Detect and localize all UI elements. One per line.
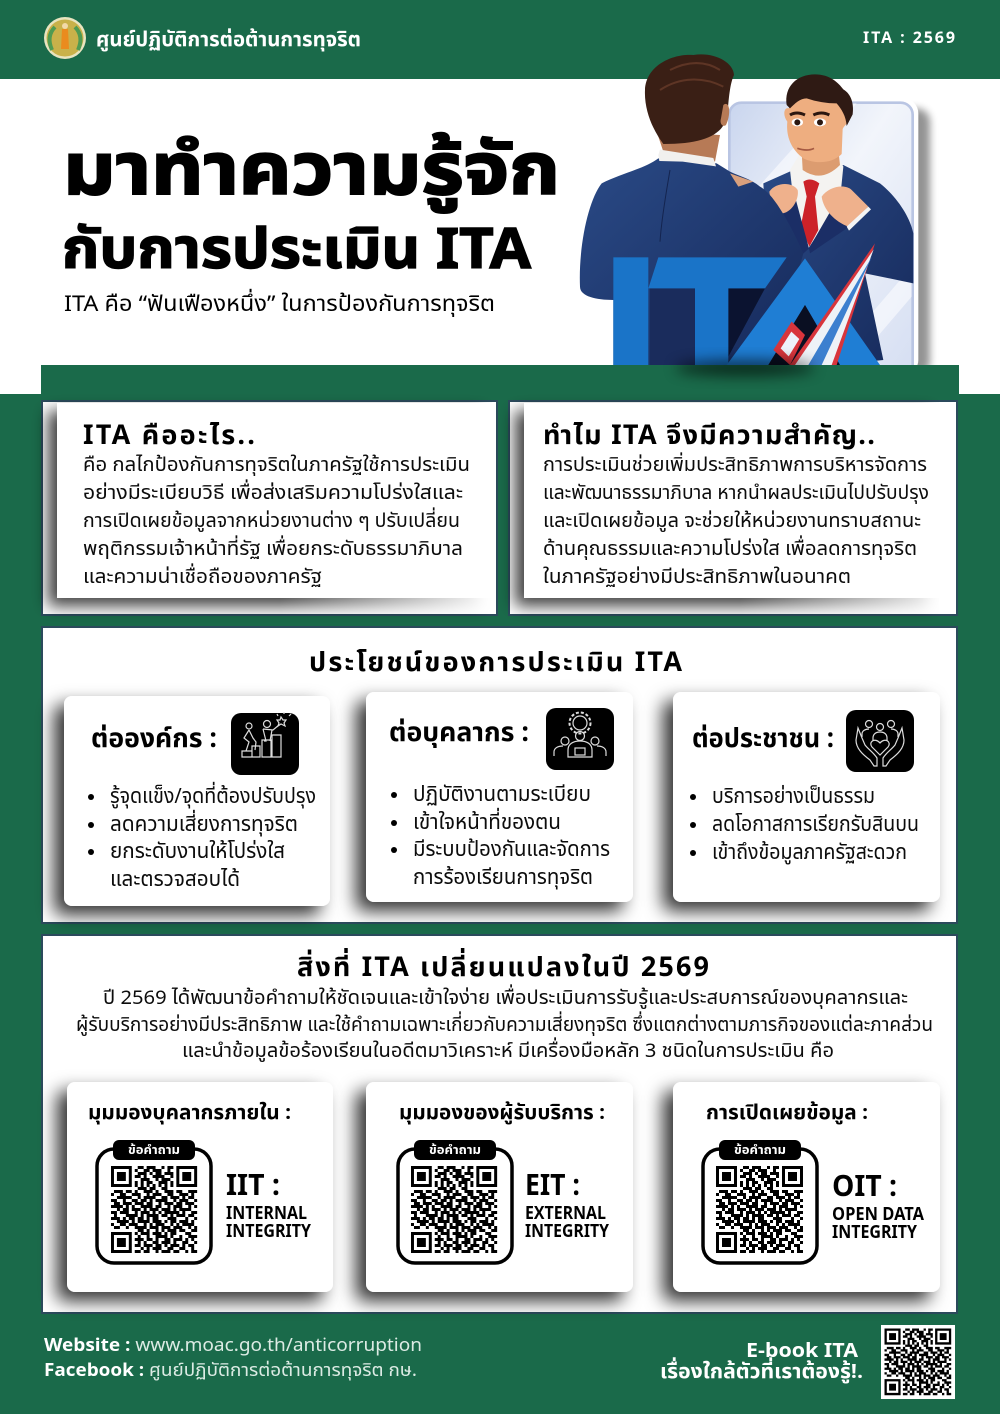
ITA logo letters [613,257,880,365]
mirror [727,98,930,379]
label: EXTERNAL [525,1201,606,1228]
QR frame: ข้อคำถาม [429,1142,481,1160]
logo seal [44,17,86,59]
card: OIT [673,1082,940,1292]
paragraph: และความน่าเชื่อถือของภาครัฐ [83,562,322,592]
footer e-book text [660,1336,863,1387]
label [525,1163,610,1246]
bullet list: เข้าใจหน้าที่ของตน [413,807,561,839]
card: EIT: มุมมองของผู้รับบริการ : [399,1098,605,1128]
card: for organisation: ต่อองค์กร : [91,719,217,760]
subtitle: ITA คือ “ฟันเฟืองหนึ่ง” ในการป้องกันการทุจริต [64,288,495,321]
label: INTEGRITY [832,1220,918,1247]
intro paragraph: ปี 2569 ได้พัฒนาข้อคำถามให้ชัดเจนและเข้าใจง่าย เพื่อประเมินการรับรู้และประสบการณ์ของบุคลากรและ [103,983,908,1013]
heading: ITA คืออะไร.. [83,416,255,457]
footer links: Website : www.moac.go.th/anticorruption [44,1333,422,1360]
label: IIT : [226,1163,280,1209]
illustration ground shadow [675,360,815,376]
label: INTEGRITY [525,1219,610,1246]
footer e-book text: เรื่องใกล้ตัวที่เราต้องรู้!. [660,1357,863,1387]
panel: benefits of ITA [42,627,957,923]
QR frame: ข้อคำถาม [734,1142,786,1160]
label [832,1164,925,1247]
label: OIT : [832,1164,897,1210]
panel: why ITA matters [509,401,957,615]
green band above panels [41,365,959,400]
icon: team with gear [546,708,614,770]
footer QR code [881,1325,955,1399]
header bar [44,17,955,59]
paragraph [83,450,470,592]
footer links [44,1333,422,1385]
panel: what is ITA [42,401,497,615]
label: INTERNAL [226,1201,307,1228]
year tag: ITA : 2569 [863,27,955,51]
heading: สิ่งที่ ITA เปลี่ยนแปลงในปี 2569 [297,948,709,989]
title [62,119,560,294]
title: กับการประเมิน ITA [62,210,531,294]
paragraph: ในภาครัฐอย่างมีประสิทธิภาพในอนาคต [543,562,851,592]
title: มาทำความรู้จัก [63,119,560,227]
bullet list: การร้องเรียนการทุจริต [413,863,593,894]
hero white band [0,79,1000,394]
card: for personnel: ต่อบุคลากร : [389,713,529,754]
card: EIT [366,1082,633,1292]
paragraph: พฤติกรรมเจ้าหน้าที่รัฐ เพื่อยกระดับธรรมาภิบาล [83,534,463,564]
bullet list [391,780,610,894]
label: EIT : [525,1163,580,1209]
heading: ประโยชน์ของการประเมิน ITA [309,643,682,684]
card: for the public [673,692,940,902]
foreground figure from behind [580,54,803,365]
bullet list: ปฏิบัติงานตามระเบียบ [413,780,591,811]
card: for personnel [366,692,633,902]
bullet list: เข้าถึงข้อมูลภาครัฐสะดวก [712,838,907,869]
card: OIT: การเปิดเผยข้อมูล : [706,1098,868,1128]
intro paragraph: ผู้รับบริการอย่างมีประสิทธิภาพ และใช้คำถามเฉพาะเกี่ยวกับความเสี่ยงทุจริต ซึ่งแตกต่างตามภารกิจของแต่ละภาคส่วน [76,1010,933,1040]
bullet list: ลดโอกาสการเรียกรับสินบน [712,810,919,841]
bullet list: ยกระดับงานให้โปร่งใส [110,837,285,868]
card: for the public: ต่อประชาชน : [692,719,834,760]
illustration: man at mirror with ITA letters [580,54,930,379]
heading: ทำไม ITA จึงมีความสำคัญ.. [543,416,875,457]
reflection figure [763,74,913,365]
paragraph: และพัฒนาธรรมาภิบาล หากนำผลประเมินไปปรับปรุง [543,478,929,508]
paragraph: ด้านคุณธรรมและความโปร่งใส เพื่อลดการทุจริต [543,534,917,564]
QR frame: ข้อคำถาม [128,1142,180,1160]
card: IIT [67,1082,333,1292]
QR frame [97,1140,211,1263]
paragraph: การประเมินช่วยเพิ่มประสิทธิภาพการบริหารจัดการ [543,450,927,480]
bullet list: และตรวจสอบได้ [110,865,240,896]
icon: climbing steps [231,712,299,775]
bullet list: บริการอย่างเป็นธรรม [712,782,875,813]
paragraph: และเปิดเผยข้อมูล จะช่วยให้หน่วยงานทราบสถานะ [543,506,921,536]
paragraph: อย่างมีระเบียบวิธี เพื่อส่งเสริมความโปร่งใสและ [83,478,463,508]
paragraph: คือ กลไกป้องกันการทุจริตในภาครัฐใช้การประเมิน [83,450,470,480]
bullet list [88,781,316,896]
ribbon checkmark [773,243,875,365]
card: for organisation [64,696,330,906]
bullet list: ลดความเสี่ยงการทุจริต [110,809,298,841]
organisation name: ศูนย์ปฏิบัติการต่อต้านการทุจริต [96,25,361,55]
label: OPEN DATA [832,1202,925,1229]
QR frame [398,1140,512,1263]
paragraph: การเปิดเผยข้อมูลจากหน่วยงานต่าง ๆ ปรับเปลี่ยน [83,506,460,536]
QR frame [703,1140,817,1263]
paragraph [543,450,929,592]
card: IIT: มุมมองบุคลากรภายใน : [88,1098,291,1128]
panel: what changes in 2569 [42,935,957,1313]
bullet list: รู้จุดแข็ง/จุดที่ต้องปรับปรุง [110,781,316,813]
intro paragraph: และนำข้อมูลข้อร้องเรียนในอดีตมาวิเคราะห์ มีเครื่องมือหลัก 3 ชนิดในการประเมิน คือ [182,1036,834,1066]
footer e-book text: E-book ITA [746,1336,858,1366]
footer links: Facebook : ศูนย์ปฏิบัติการต่อต้านการทุจริต กษ. [44,1358,417,1385]
label [226,1163,312,1246]
label: INTEGRITY [226,1219,312,1246]
intro paragraph [76,983,933,1066]
bullet list: มีระบบป้องกันและจัดการ [413,835,610,866]
icon: hands holding people [846,710,914,772]
bullet list [690,782,919,869]
